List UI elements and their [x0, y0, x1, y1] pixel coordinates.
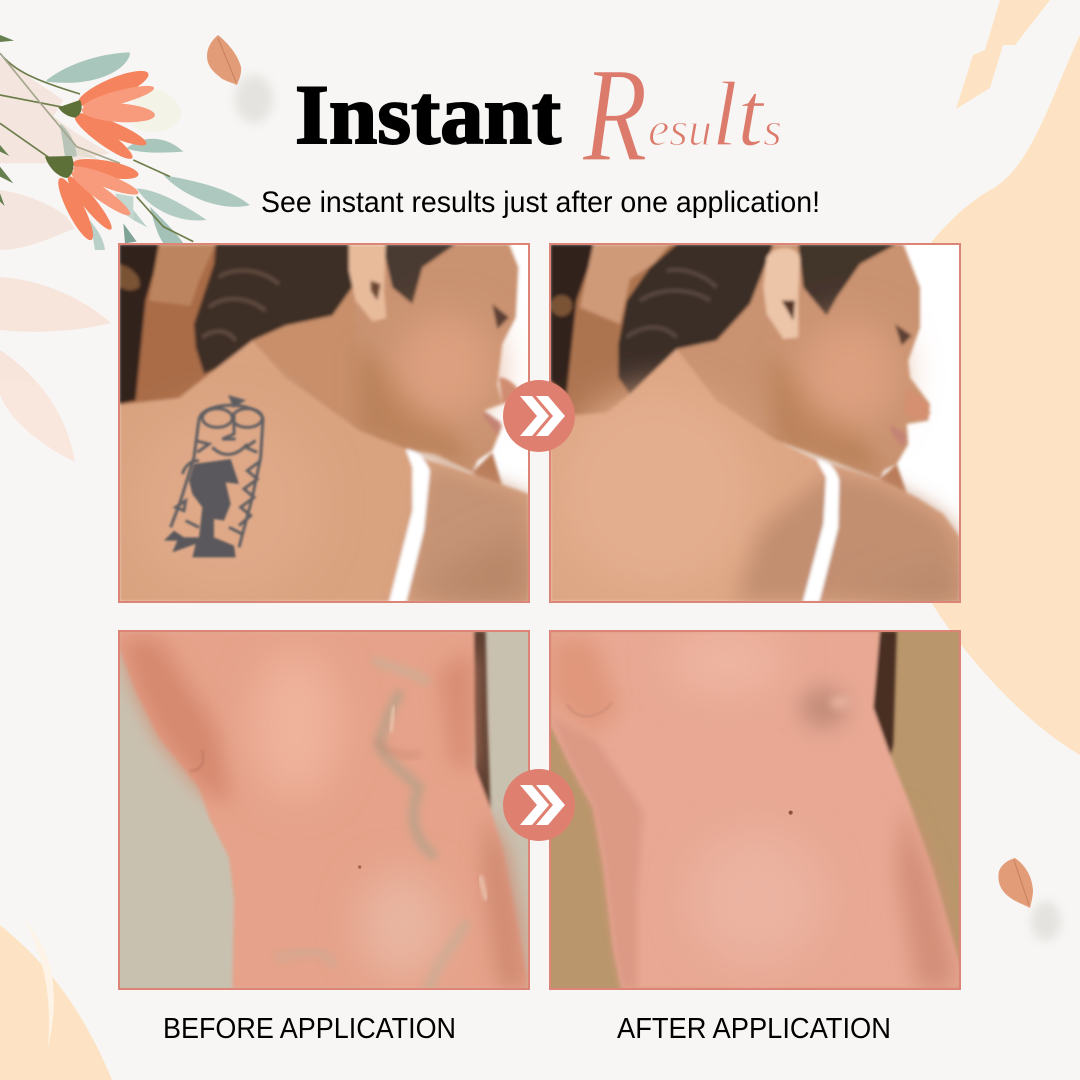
pale floral leaves — [0, 277, 111, 462]
floral illustration — [0, 35, 250, 250]
photo: tattoo before — [119, 244, 529, 602]
arrow badge top — [503, 380, 575, 452]
label: after: AFTER APPLICATION — [617, 1013, 891, 1045]
photo: leg before — [119, 631, 529, 989]
falling petal bottom — [998, 858, 1061, 941]
photo: tattoo after — [550, 244, 960, 602]
arrow badge bottom — [503, 769, 575, 841]
photo frames — [119, 244, 960, 989]
falling petal top — [207, 35, 273, 123]
photo: leg after — [550, 628, 960, 989]
tattoo — [164, 397, 263, 557]
title: R — [582, 41, 647, 190]
label: before: BEFORE APPLICATION — [163, 1013, 456, 1045]
subtitle: See instant results just after one application! — [261, 186, 820, 219]
title: Instant — [295, 68, 561, 162]
title: esults — [648, 63, 782, 165]
title — [295, 41, 782, 190]
